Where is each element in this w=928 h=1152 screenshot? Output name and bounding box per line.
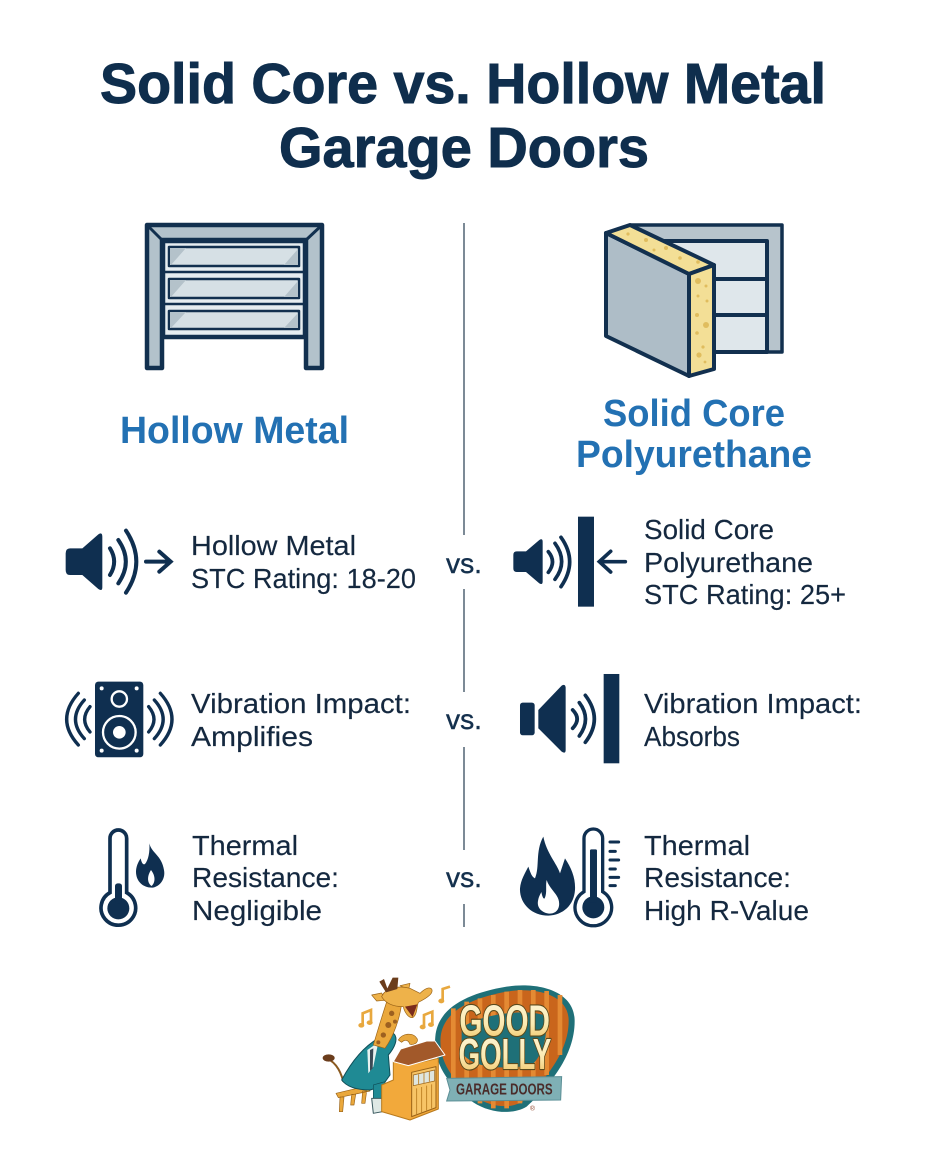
text: thermal negligible: Resistance:	[192, 862, 339, 893]
text: solid core STC: Solid Core	[644, 514, 774, 545]
text: thermal negligible: Thermal	[192, 830, 298, 861]
icon: solid core door	[606, 225, 782, 376]
text: thermal negligible	[192, 830, 339, 926]
text: solid core STC: Polyurethane	[644, 547, 813, 578]
text: hollow metal STC: STC Rating: 18-20	[191, 563, 416, 594]
logo wordmark: GOLLY	[459, 1031, 551, 1079]
icon: speaker absorbed by wall	[520, 674, 619, 763]
text: vibration absorbs: Absorbs	[644, 721, 740, 752]
label: vs row 2: vs.	[446, 704, 482, 735]
heading: solid core polyurethane: Solid Core	[603, 393, 785, 435]
icon: hollow metal garage door	[147, 225, 322, 368]
text: vibration amplifies: Vibration Impact:	[191, 688, 411, 719]
logo wordmark	[459, 998, 551, 1079]
logo wordmark: GOOD	[459, 998, 550, 1046]
logo banner: ®	[530, 1105, 535, 1113]
text: vibration amplifies: Amplifies	[191, 721, 313, 752]
text: thermal high r-value: Resistance:	[644, 862, 791, 893]
text: vibration amplifies	[191, 688, 411, 752]
text: thermal negligible: Negligible	[192, 895, 322, 926]
heading: hollow metal: Hollow Metal	[120, 410, 349, 452]
icon: sound blocked by wall	[513, 517, 625, 607]
logo banner	[447, 1077, 562, 1113]
text: thermal high r-value: High R-Value	[644, 895, 809, 926]
text: solid core STC	[644, 514, 846, 610]
heading: solid core polyurethane	[576, 393, 812, 476]
label: vs row 1: vs.	[446, 548, 482, 579]
icon: thermometer with small flame	[101, 830, 164, 925]
text: thermal high r-value: Thermal	[644, 830, 750, 861]
title	[100, 52, 826, 180]
logo banner: GARAGE DOORS	[456, 1081, 553, 1098]
text: vibration absorbs: Vibration Impact:	[644, 688, 862, 719]
icon: sound passing through	[66, 531, 171, 593]
text: solid core STC: STC Rating: 25+	[644, 579, 846, 610]
logo garage house	[382, 1041, 445, 1120]
label: vs row 3: vs.	[446, 862, 482, 893]
logo: Good Golly Garage Doors	[323, 978, 575, 1120]
logo shield	[435, 985, 575, 1112]
title: Solid Core vs. Hollow Metal	[100, 52, 826, 116]
icon: vibrating speaker	[67, 682, 172, 757]
text: hollow metal STC	[191, 530, 416, 594]
logo giraffe	[323, 978, 432, 1113]
icon: big flame and thermometer	[520, 829, 619, 926]
title: Garage Doors	[279, 116, 649, 180]
heading: solid core polyurethane: Polyurethane	[576, 434, 812, 476]
logo music notes	[358, 987, 450, 1029]
text: hollow metal STC: Hollow Metal	[191, 530, 356, 561]
text: vibration absorbs	[644, 688, 862, 752]
text: thermal high r-value	[644, 830, 809, 926]
